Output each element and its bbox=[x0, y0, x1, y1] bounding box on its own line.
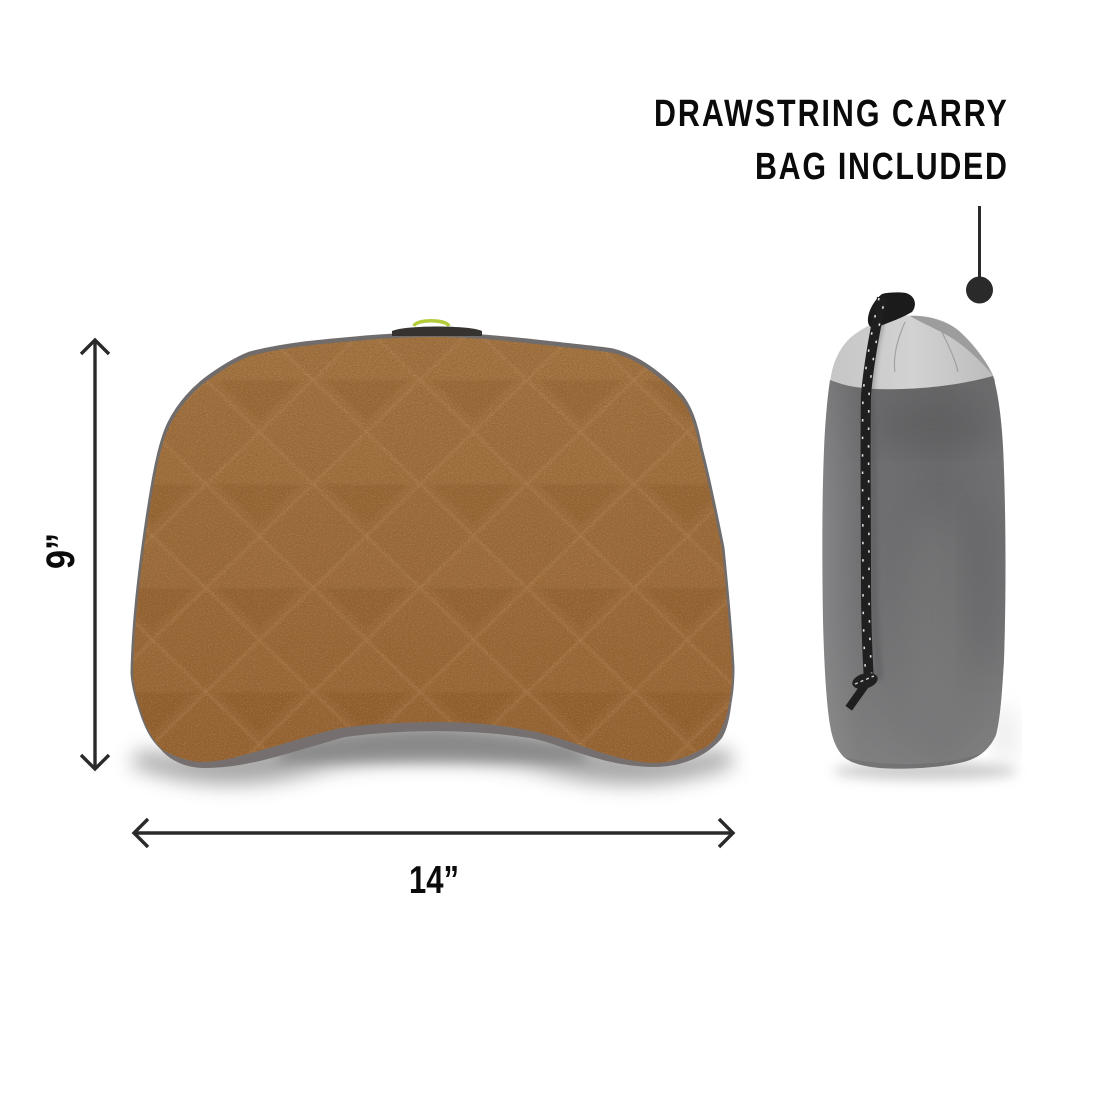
label: 9 inches: 9” bbox=[39, 533, 83, 569]
bag top right shaded fold bbox=[910, 316, 993, 376]
bag shading and wrinkles bbox=[826, 380, 1006, 769]
cord flecks right bbox=[869, 298, 885, 680]
cord shadow bbox=[870, 310, 884, 680]
infographic canvas bbox=[46, 100, 1018, 893]
bag light top bbox=[830, 316, 995, 392]
toggle bbox=[868, 292, 915, 328]
pillow brown quilted fabric bbox=[125, 330, 740, 770]
shadow: pillow bbox=[130, 725, 735, 784]
valve tab bbox=[392, 321, 482, 336]
cord knot and tail bbox=[851, 670, 879, 705]
heading line 1: DRAWSTRING CARRY bbox=[654, 93, 1007, 135]
bag top gathers bbox=[894, 322, 958, 372]
pillow grey rim bbox=[133, 335, 732, 761]
heading line 2: BAG INCLUDED bbox=[755, 146, 1007, 188]
arrow: width dimension bbox=[134, 819, 733, 847]
arrow: height dimension bbox=[81, 340, 109, 769]
pillow bbox=[125, 321, 740, 770]
heading: carry bag callout bbox=[654, 93, 1007, 188]
carry bag bbox=[815, 292, 1010, 775]
drawcord bbox=[866, 298, 882, 680]
shadow: bag bbox=[833, 705, 1017, 780]
cord reflective flecks bbox=[863, 298, 879, 680]
bag dark body bbox=[822, 376, 1006, 769]
label: 14 inches: 14” bbox=[409, 859, 459, 902]
pillow lower gusset bbox=[133, 670, 733, 768]
callout pointer bbox=[966, 206, 993, 304]
